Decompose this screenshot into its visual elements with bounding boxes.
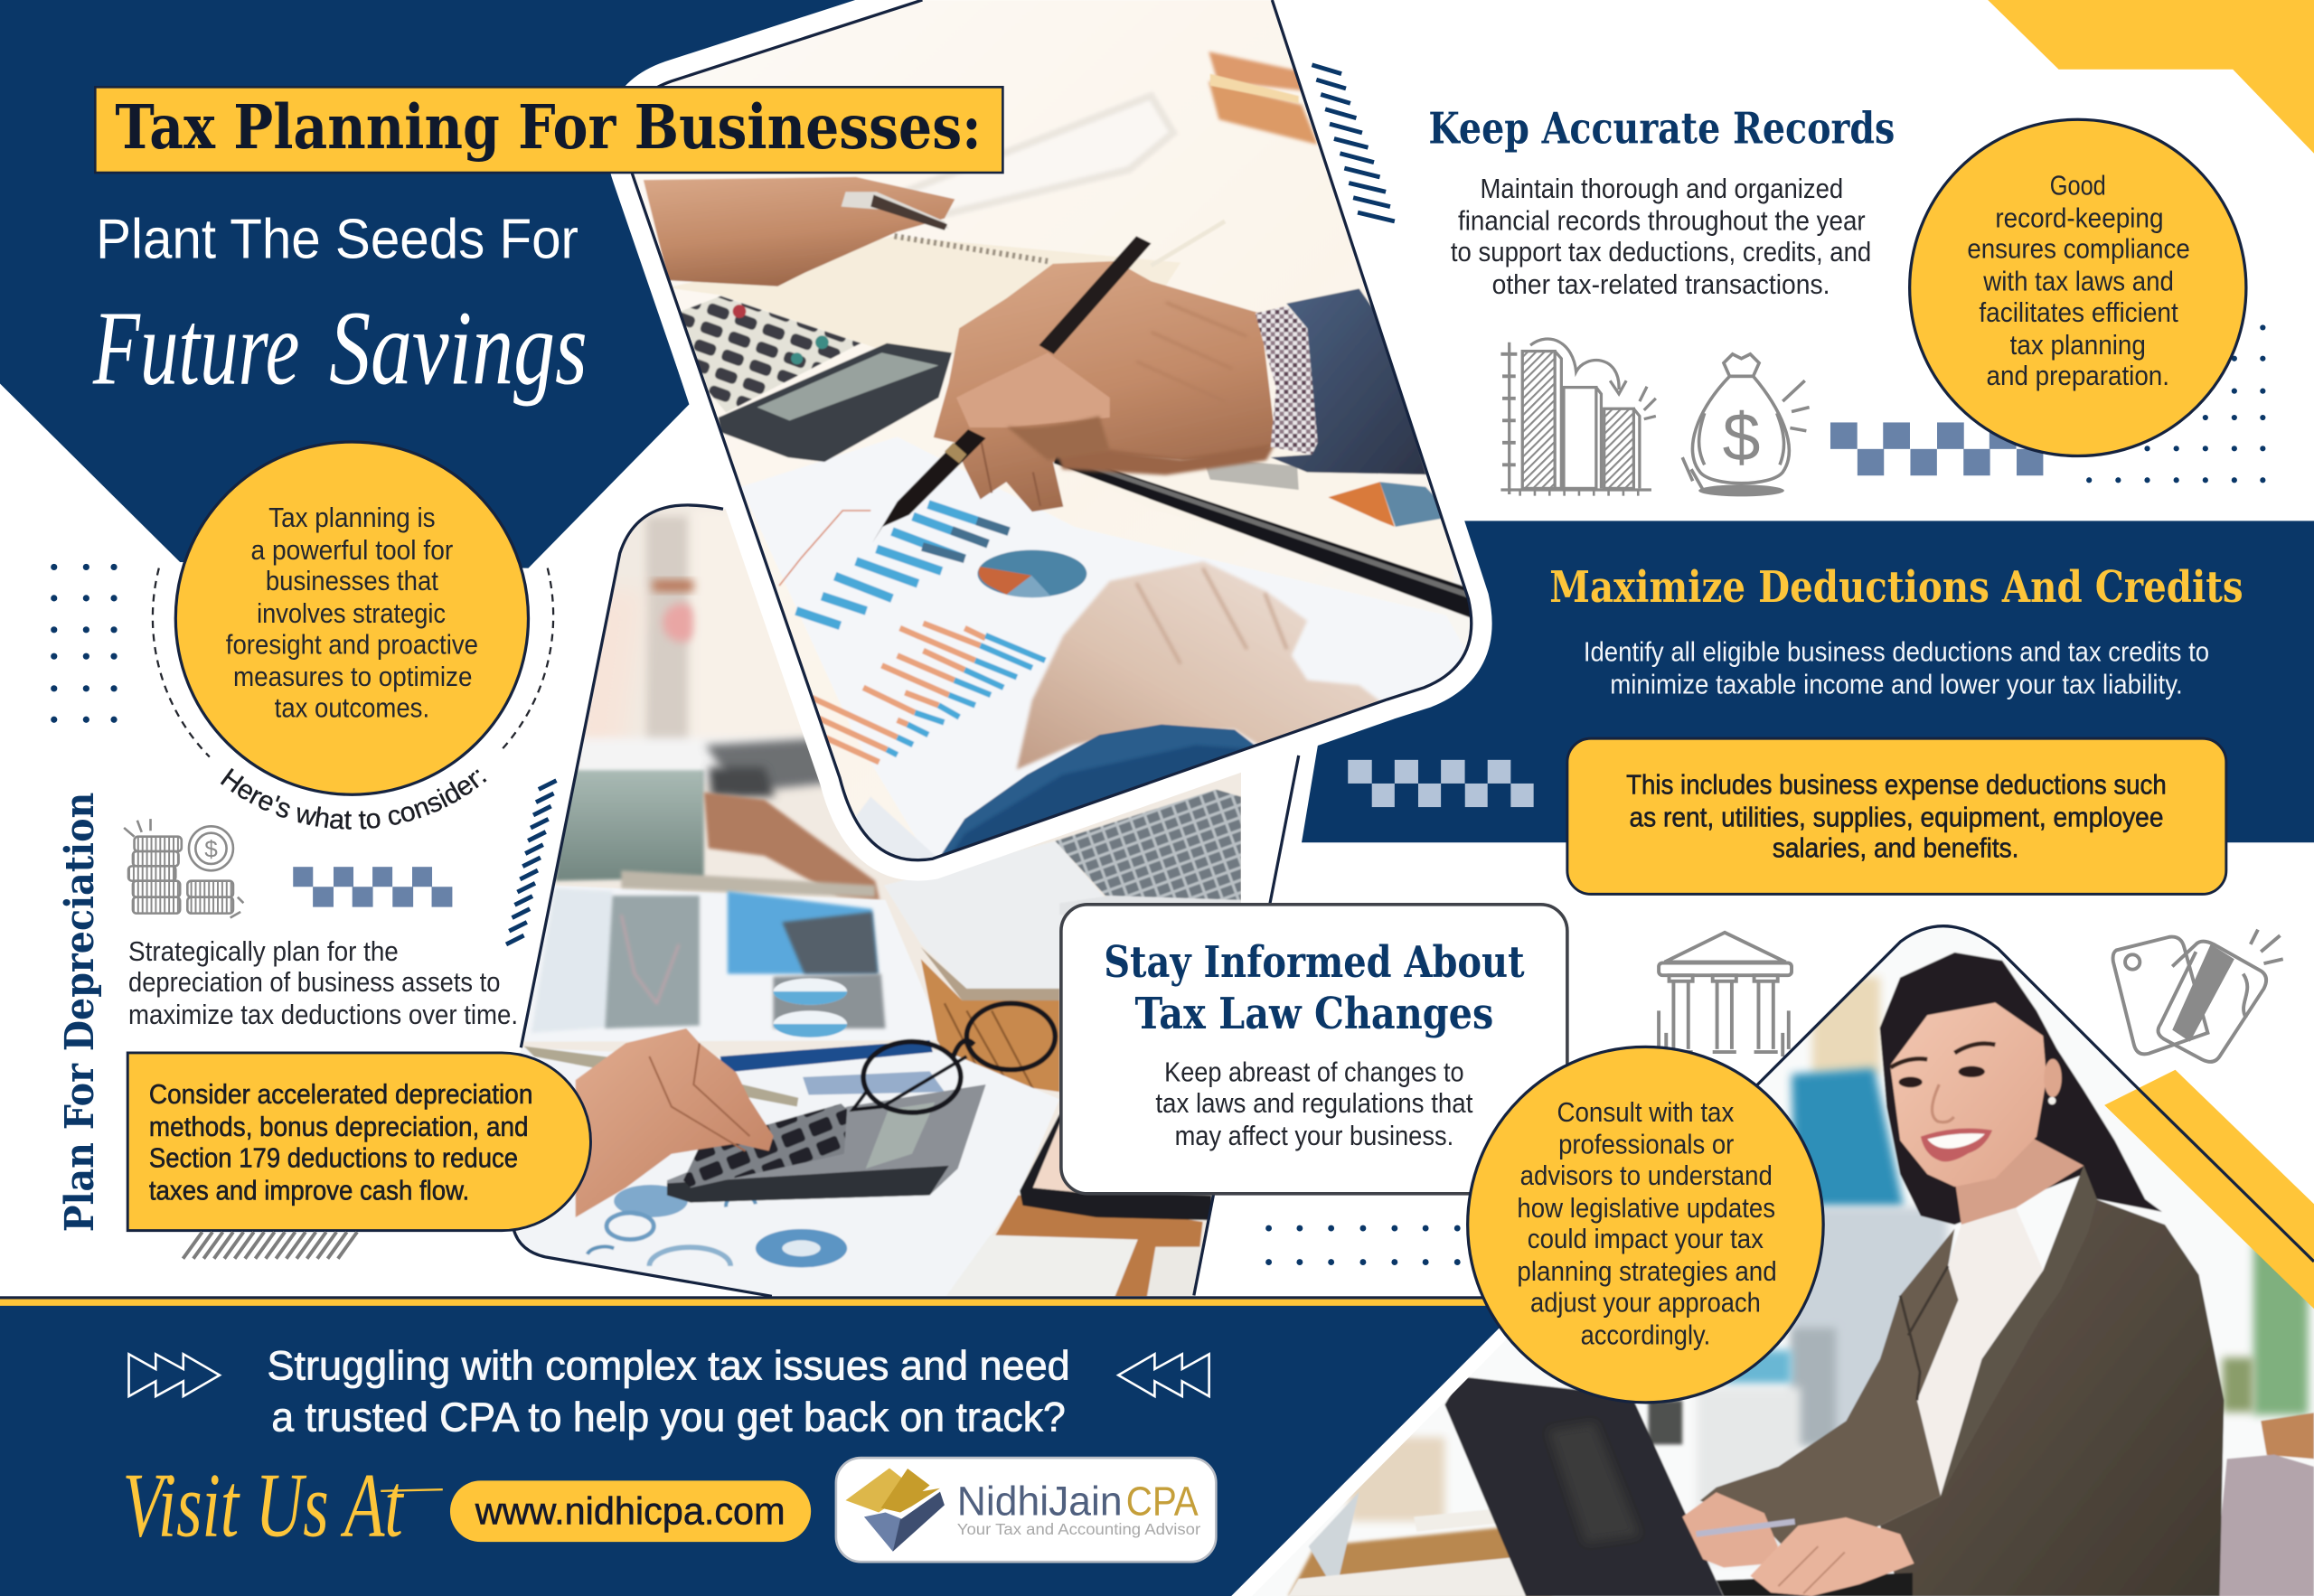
circle: good record-keeping: and preparation. <box>1987 361 2169 391</box>
circle: consult with tax professionals: adjust your approach <box>1530 1288 1761 1318</box>
intro circle: involves strategic <box>257 599 446 629</box>
checker pattern: upper right <box>1830 422 2043 475</box>
callout: accelerated depreciation: methods, bonus depreciation, and <box>149 1113 528 1142</box>
circle: consult with tax professionals: how legislative updates <box>1517 1194 1775 1224</box>
diagonal stripes: centre left <box>506 781 557 944</box>
checker pattern: on navy <box>1348 760 1534 807</box>
circle: good record-keeping <box>1910 119 2246 455</box>
icon: coins <box>124 819 243 918</box>
arrows: right chevrons <box>1118 1354 1209 1396</box>
dot grid left <box>51 564 118 723</box>
bottom navy call-to-action band <box>0 1296 1535 1596</box>
vertical heading: plan for depreciation: Plan For Depreciation <box>57 793 103 1232</box>
callout: accelerated depreciation: Consider accelerated depreciation <box>149 1080 532 1110</box>
text: identify deductions <box>1584 637 2209 699</box>
photo frame outline <box>1756 926 2314 1262</box>
photo: desk with calculator, glasses and charts <box>502 487 1269 1313</box>
circle: good record-keeping: record-keeping <box>1995 203 2163 233</box>
divider line right of desk photo <box>1194 756 1299 1295</box>
card: stay informed: Tax Law Changes <box>1135 990 1493 1039</box>
website pill <box>450 1480 811 1542</box>
dot rows under card <box>1265 1225 1461 1265</box>
callout: business expenses: This includes business expense deductions such <box>1626 770 2167 800</box>
call to action text <box>268 1343 1070 1441</box>
yellow diagonal stripe <box>2104 1070 2314 1309</box>
script label: visit us at: Visit Us At <box>123 1455 405 1556</box>
script subtitle: future savings: Savings <box>329 289 588 407</box>
callout: business expenses <box>1567 738 2226 894</box>
text: strategically plan <box>128 937 518 1030</box>
card: stay informed: may affect your business. <box>1175 1122 1453 1151</box>
title bar: Tax Planning For Businesses: <box>115 91 982 163</box>
intro circle: businesses that <box>266 567 438 596</box>
logo mark <box>846 1469 945 1552</box>
photo frame outline <box>626 0 1472 860</box>
logo card: Your Tax and Accounting Advisor <box>957 1520 1200 1538</box>
circle: consult with tax professionals: professionals or <box>1558 1131 1734 1160</box>
intro circle: foresight and proactive <box>226 630 478 660</box>
text: strategically plan: Strategically plan for the <box>128 937 399 967</box>
navy band: maximize deductions <box>1302 521 2314 842</box>
intro circle <box>175 442 528 794</box>
curved label: here's what to consider: Here's what to consider: <box>221 768 486 830</box>
cover for stripe right of diagonal <box>1498 1295 1565 1336</box>
text: maintain records <box>1451 174 1871 300</box>
callout: accelerated depreciation: taxes and improve cash flow. <box>149 1176 469 1206</box>
circle: consult with tax professionals: advisors to understand <box>1520 1161 1773 1191</box>
circle: good record-keeping: Good <box>2050 172 2106 202</box>
gray hatch under callout <box>183 1232 357 1259</box>
callout: accelerated depreciation: Section 179 deductions to reduce <box>149 1143 518 1173</box>
circle: consult with tax professionals: planning strategies and <box>1517 1257 1777 1287</box>
circle: good record-keeping: facilitates efficient <box>1979 298 2178 328</box>
script subtitle: future savings: Future <box>92 289 299 407</box>
diagonal stripes: top centre <box>1312 65 1395 221</box>
yellow corner shape top right <box>1988 0 2314 154</box>
checker pattern: left <box>293 867 452 907</box>
circle: good record-keeping: with tax laws and <box>1982 268 2174 297</box>
icon: payment cards <box>2113 930 2283 1062</box>
photo: smiling businesswoman at laptop <box>1239 915 2314 1596</box>
dashed arc around intro circle <box>153 568 553 757</box>
navy header panel <box>0 0 861 568</box>
logo card: NidhiJain <box>957 1479 1123 1525</box>
text: strategically plan: maximize tax deductions over time. <box>128 1000 518 1030</box>
dot grid: upper right <box>2086 324 2265 483</box>
text: strategically plan: depreciation of business assets to <box>128 968 500 998</box>
text: maintain records: Maintain thorough and organized <box>1481 174 1843 204</box>
card: stay informed <box>1061 905 1567 1194</box>
text: identify deductions: minimize taxable income and lower your tax liability. <box>1610 670 2183 699</box>
photo frame outline <box>513 505 772 1296</box>
heading: keep accurate records: Keep Accurate Records <box>1428 104 1895 154</box>
photo: hands with pen and financial charts <box>576 0 1520 886</box>
text: maintain records: financial records throughout the year <box>1458 207 1866 237</box>
text: identify deductions: Identify all eligible business deductions and tax credits to <box>1584 637 2209 667</box>
text: maintain records: other tax-related transactions. <box>1492 270 1830 300</box>
circle: consult with tax professionals: Consult with tax <box>1557 1098 1734 1128</box>
script subtitle: future savings <box>92 289 588 407</box>
logo card: CPA <box>1126 1479 1199 1525</box>
intro circle: a powerful tool for <box>251 536 453 566</box>
intro circle: Tax planning is <box>268 503 436 533</box>
callout: business expenses: salaries, and benefits. <box>1773 834 2018 864</box>
subtitle: plant the seeds: Plant The Seeds For <box>96 209 578 271</box>
card: stay informed: Stay Informed About <box>1104 938 1525 988</box>
icon: bank <box>1659 933 1792 1056</box>
icon: bar chart <box>1500 339 1656 496</box>
callout: business expenses: as rent, utilities, supplies, equipment, employee <box>1629 803 2163 832</box>
intro circle: measures to optimize <box>233 662 472 692</box>
website pill: www.nidhicpa.com <box>475 1490 785 1533</box>
call to action text: Struggling with complex tax issues and need <box>268 1343 1070 1389</box>
callout: accelerated depreciation <box>127 1053 590 1231</box>
icon: money bag <box>1682 354 1810 496</box>
circle: consult with tax professionals: accordingly. <box>1581 1320 1710 1350</box>
icon: coins: $ <box>204 836 218 863</box>
card: stay informed: Keep abreast of changes to <box>1164 1058 1464 1088</box>
text: maintain records: to support tax deductions, credits, and <box>1451 238 1871 268</box>
icon: money bag: $ <box>1723 399 1760 474</box>
logo card <box>836 1458 1216 1562</box>
arrows: left chevrons <box>129 1354 220 1396</box>
card: stay informed: tax laws and regulations that <box>1155 1089 1473 1119</box>
circle: consult with tax professionals: could impact your tax <box>1528 1225 1764 1254</box>
circle: good record-keeping: ensures compliance <box>1967 235 2190 265</box>
circle: consult with tax professionals <box>1468 1047 1823 1403</box>
call to action text: a trusted CPA to help you get back on track? <box>271 1394 1066 1441</box>
circle: good record-keeping: tax planning <box>2010 331 2146 361</box>
intro circle: tax outcomes. <box>275 693 429 723</box>
